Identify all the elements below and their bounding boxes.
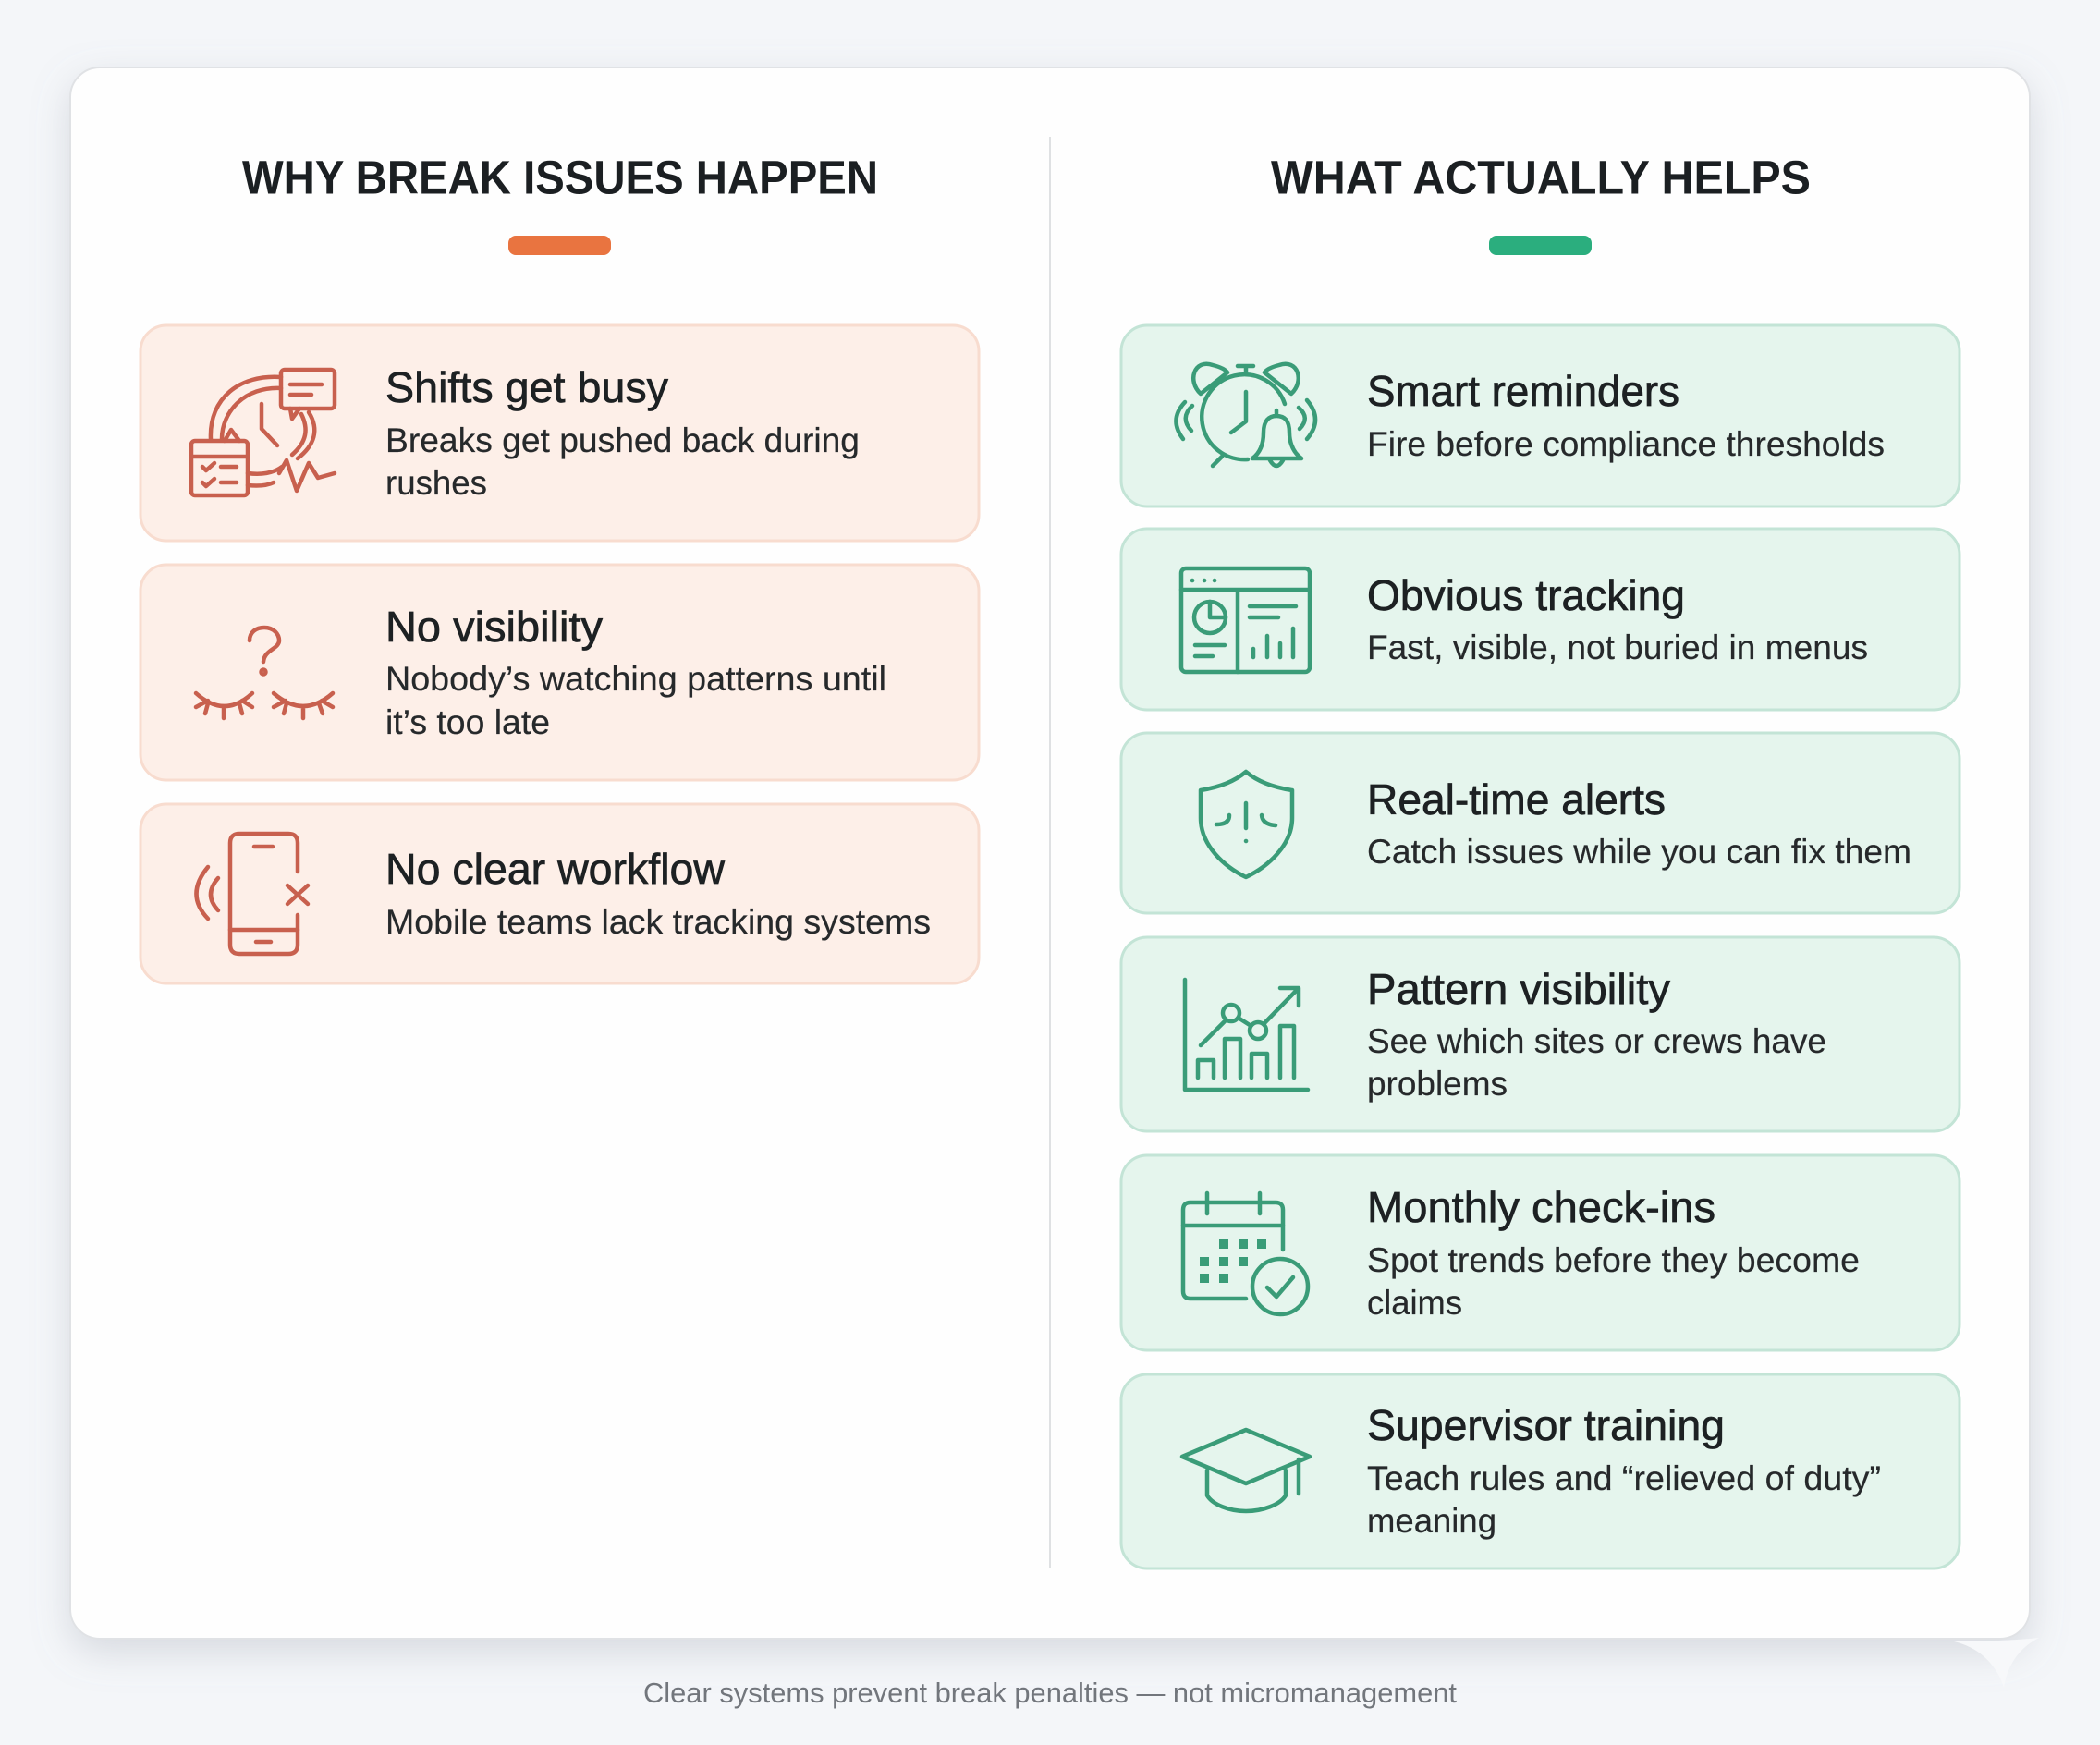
heading: what actually helps: WHAT ACTUALLY HELPS [1271, 152, 1811, 203]
panel: no clear workflow [140, 804, 979, 983]
title and text: Monthly check-ins [1367, 1183, 1715, 1231]
title and text: Obvious tracking [1367, 571, 1685, 619]
panel: shifts get busy [140, 325, 979, 541]
title and text: Breaks get pushed back during [385, 421, 860, 459]
panel: obvious tracking [1121, 529, 1960, 710]
footer caption: Clear systems prevent break penalties — not micromanagement [643, 1677, 1457, 1709]
panel: pattern visibility [1121, 937, 1960, 1131]
title and text [385, 363, 860, 502]
title and text [1367, 965, 1826, 1103]
orange accent bar [508, 236, 611, 255]
title and text [1367, 1183, 1860, 1322]
title and text: Supervisor training [1367, 1401, 1725, 1449]
panel: no visibility [140, 565, 979, 780]
panel: monthly check-ins [1121, 1155, 1960, 1350]
title and text: Teach rules and “relieved of duty” [1367, 1459, 1881, 1497]
title and text [1367, 1401, 1881, 1540]
title and text: Spot trends before they become [1367, 1241, 1860, 1279]
title and text: Pattern visibility [1367, 965, 1670, 1013]
title and text [1367, 367, 1885, 463]
title and text: it’s too late [385, 703, 550, 741]
icon: rising chart [1185, 980, 1308, 1090]
title and text: problems [1367, 1065, 1508, 1103]
icon: shield alert [1201, 772, 1292, 877]
icon: alarm clock and bell [1176, 364, 1315, 466]
title and text: Fast, visible, not buried in menus [1367, 628, 1868, 666]
title and text [1367, 775, 1911, 871]
title and text: Smart reminders [1367, 367, 1679, 415]
title and text: rushes [385, 464, 487, 502]
title and text: No visibility [385, 603, 603, 651]
title and text: Nobody’s watching patterns until [385, 660, 886, 698]
title and text: meaning [1367, 1502, 1496, 1540]
icon: closed eyes with question mark [196, 628, 333, 718]
heading: why break issues happen: WHY BREAK ISSUES HAPPEN [242, 152, 878, 203]
title and text: Catch issues while you can fix them [1367, 833, 1911, 871]
title and text: Shifts get busy [385, 363, 668, 411]
title and text [385, 603, 886, 741]
panel: real-time alerts [1121, 733, 1960, 913]
title and text: See which sites or crews have [1367, 1022, 1826, 1060]
title and text: Fire before compliance thresholds [1367, 425, 1885, 463]
panel: supervisor training [1121, 1374, 1960, 1568]
title and text: claims [1367, 1284, 1462, 1322]
title and text [1367, 571, 1868, 666]
title and text: No clear workflow [385, 845, 726, 893]
icon: graduation cap [1182, 1430, 1310, 1511]
panel: smart reminders [1121, 325, 1960, 506]
icon: dashboard window [1181, 568, 1310, 672]
icon: phone with x [196, 834, 308, 954]
heading: what actually helps [1271, 152, 1811, 255]
title and text: Real-time alerts [1367, 775, 1666, 824]
green accent bar [1489, 236, 1592, 255]
heading: why break issues happen [242, 152, 878, 255]
title and text [385, 845, 931, 941]
watermark sparkle [1954, 1638, 2039, 1688]
title and text: Mobile teams lack tracking systems [385, 903, 931, 941]
icon: busy shift clock, chat, calendar [191, 370, 335, 495]
icon: calendar with check [1183, 1193, 1308, 1314]
